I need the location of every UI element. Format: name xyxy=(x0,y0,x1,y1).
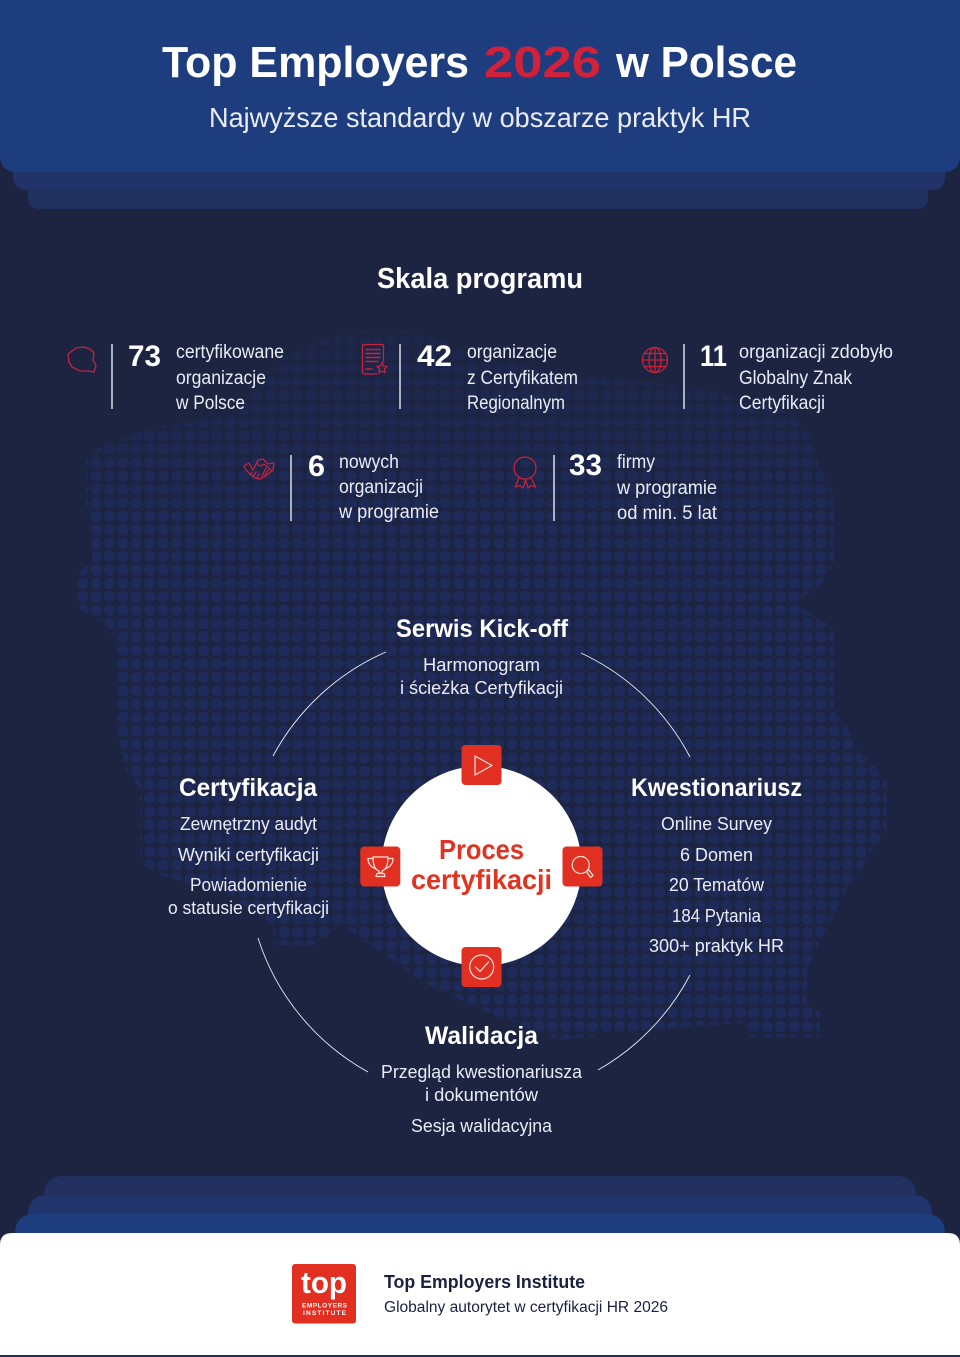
process step: Kwestionariusz xyxy=(631,774,802,956)
process step: Walidacja: Walidacja xyxy=(425,1022,539,1050)
stat: 33 companies five years: od min. 5 lat xyxy=(617,503,718,524)
stat: 6 new organisations xyxy=(244,450,439,523)
stat: 11 global certification: Certyfikacji xyxy=(739,393,825,414)
stat: 6 new organisations: nowych xyxy=(339,452,399,473)
central circle: Proces certyfikacji xyxy=(382,766,582,966)
process step: Certyfikacja xyxy=(168,774,329,918)
title: 2026 xyxy=(484,38,601,87)
stat: 33 companies five years: 33 xyxy=(569,449,602,482)
heading: Skala programu: Skala programu xyxy=(377,263,583,295)
stat: 42 regional certificates: organizacje xyxy=(467,342,557,363)
process step: Kwestionariusz: Kwestionariusz xyxy=(631,774,802,802)
stat: 33 companies five years: w programie xyxy=(616,478,717,499)
logo: Top Employers Institute xyxy=(292,1264,356,1324)
process step: Serwis Kick-off: Serwis Kick-off xyxy=(396,615,569,643)
title: Top Employers xyxy=(162,38,469,87)
icon: play xyxy=(462,745,502,785)
process step: Kwestionariusz: 300+ praktyk HR xyxy=(649,935,784,956)
process step: Certyfikacja: Wyniki certyfikacji xyxy=(178,844,319,865)
footer stacked tabs xyxy=(15,1176,945,1245)
logo: Top Employers Institute: EMPLOYERS xyxy=(302,1302,348,1310)
header banner xyxy=(0,0,960,209)
stat: 11 global certification: organizacji zdobyło xyxy=(739,342,893,363)
process step: Walidacja: Sesja walidacyjna xyxy=(411,1115,553,1136)
stat: 42 regional certificates: 42 xyxy=(417,340,452,373)
process step: Certyfikacja: Zewnętrzny audyt xyxy=(180,813,317,834)
title xyxy=(162,38,797,87)
footer panel xyxy=(0,1233,960,1357)
stat: 42 regional certificates xyxy=(362,340,578,414)
process step: Kwestionariusz: 6 Domen xyxy=(680,844,753,865)
process step: Kwestionariusz: 20 Tematów xyxy=(669,874,765,895)
stat: 11 global certification xyxy=(642,340,893,414)
logo: Top Employers Institute: top xyxy=(301,1265,347,1300)
process step: Certyfikacja: Powiadomienie xyxy=(190,874,307,895)
stat: 73 certified organisations: organizacje xyxy=(176,368,266,389)
stat: 33 companies five years xyxy=(514,449,718,524)
process step: Serwis Kick-off xyxy=(396,615,569,698)
icon: handshake xyxy=(244,459,274,479)
central circle: Proces certyfikacji: certyfikacji xyxy=(411,864,552,895)
process step: Certyfikacja: o statusie certyfikacji xyxy=(168,897,329,918)
process step: Walidacja: i dokumentów xyxy=(425,1084,539,1105)
icon: trophy xyxy=(360,846,400,886)
logo: Top Employers Institute: INSTITUTE xyxy=(303,1310,347,1317)
process step: Walidacja xyxy=(381,1022,583,1136)
stat: 33 companies five years: firmy xyxy=(617,452,655,473)
central circle: Proces certyfikacji: Proces xyxy=(439,834,524,865)
stat: 11 global certification: 11 xyxy=(700,340,727,373)
icon: Poland outline xyxy=(68,347,96,372)
footer tagline: Globalny autorytet w certyfikacji HR 2026 xyxy=(384,1299,668,1316)
process step: Serwis Kick-off: i ścieżka Certyfikacji xyxy=(400,677,563,698)
stat: 11 global certification: Globalny Znak xyxy=(739,368,852,389)
stat: 73 certified organisations: w Polsce xyxy=(175,393,245,414)
stat: 6 new organisations: organizacji xyxy=(339,477,423,498)
stat: 6 new organisations: w programie xyxy=(338,502,439,523)
process step: Walidacja: Przegląd kwestionariusza xyxy=(381,1061,583,1082)
icon: magnifier xyxy=(562,846,602,886)
process step: Kwestionariusz: 184 Pytania xyxy=(672,905,762,926)
stat: 6 new organisations: 6 xyxy=(308,450,325,483)
subtitle: Najwyższe standardy w obszarze praktyk HR xyxy=(209,102,751,133)
stat: 42 regional certificates: z Certyfikatem xyxy=(467,368,578,389)
icon: rosette xyxy=(514,457,536,488)
process cycle arcs xyxy=(258,652,690,1072)
footer organisation name: Top Employers Institute xyxy=(384,1271,585,1292)
dotted map of Poland xyxy=(60,325,900,1040)
stat: 73 certified organisations: 73 xyxy=(128,340,161,373)
icon: check xyxy=(462,947,502,987)
stat: 73 certified organisations xyxy=(68,340,284,414)
icon: certificate xyxy=(362,344,387,374)
process step: Serwis Kick-off: Harmonogram xyxy=(423,654,540,675)
stat: 73 certified organisations: certyfikowane xyxy=(176,342,284,363)
process step: Kwestionariusz: Online Survey xyxy=(661,813,773,834)
stat: 42 regional certificates: Regionalnym xyxy=(467,393,565,414)
process step: Certyfikacja: Certyfikacja xyxy=(179,774,318,802)
icon: globe xyxy=(642,348,668,372)
title: w Polsce xyxy=(615,38,797,87)
